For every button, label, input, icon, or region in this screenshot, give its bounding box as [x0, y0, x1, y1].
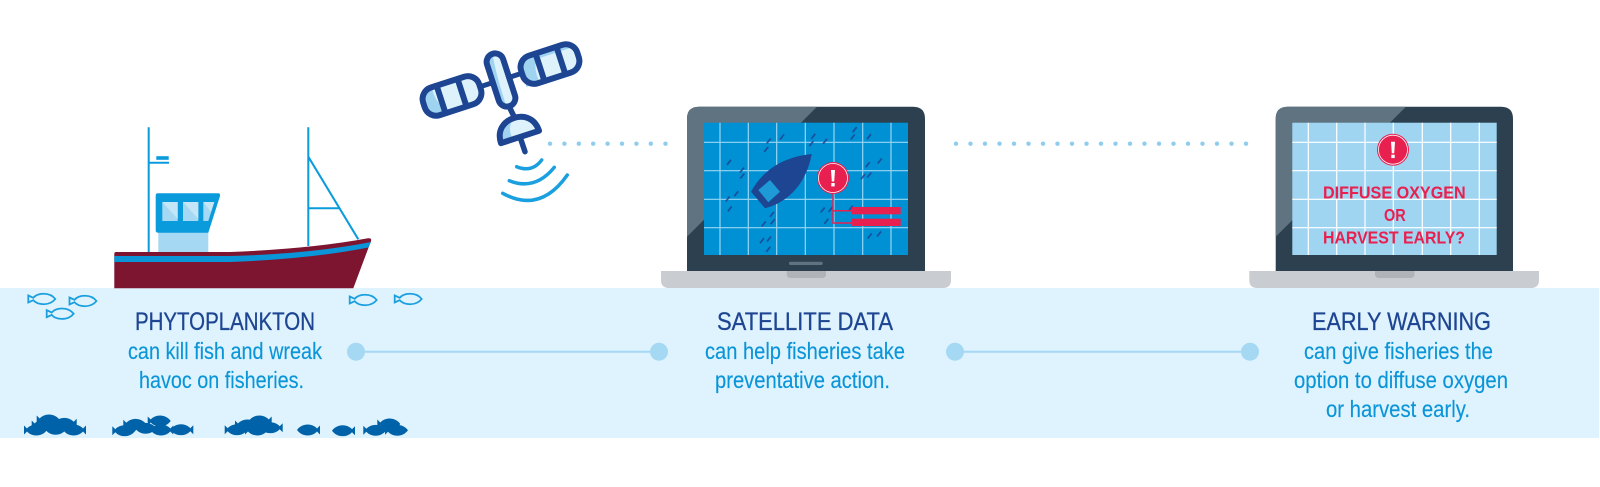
warning screen [1292, 123, 1497, 255]
hull [114, 238, 371, 288]
satellite connector and stem [510, 108, 525, 152]
satellite dish [495, 112, 539, 143]
alert labels [852, 207, 901, 226]
laptop base [661, 271, 951, 288]
warning text: OR [1384, 205, 1406, 225]
warning text: DIFFUSE OXYGEN [1323, 182, 1466, 202]
warning text: HARVEST EARLY? [1323, 227, 1465, 247]
body: or harvest early. [1326, 396, 1470, 422]
connector: phytoplankton to satellite data [347, 343, 668, 361]
body [1294, 338, 1508, 422]
body: can help fisheries take [705, 338, 905, 364]
satellite body and panels [415, 29, 587, 131]
lid highlight [1276, 107, 1406, 237]
heading: SATELLITE DATA [717, 308, 893, 336]
fishing boat [114, 127, 371, 288]
wheelhouse [156, 193, 220, 233]
body: can kill fish and wreak [128, 338, 322, 364]
alert badge [1377, 134, 1409, 166]
solid fish groups [24, 415, 408, 436]
body: option to diffuse oxygen [1294, 367, 1508, 393]
warning text [1323, 182, 1466, 247]
hull stripe [114, 242, 371, 262]
map screen [704, 123, 908, 255]
alert leader lines [833, 192, 852, 223]
outline fish school [28, 294, 422, 319]
body [705, 338, 905, 393]
lid highlight [687, 107, 817, 237]
connector: satellite data to early warning [946, 343, 1259, 361]
text block: satellite data [705, 308, 905, 393]
base notch [1375, 271, 1414, 278]
alert badge [817, 162, 849, 194]
cabin base [158, 232, 208, 253]
front mast [149, 127, 169, 252]
text block: phytoplankton [128, 308, 322, 393]
water band [0, 288, 1599, 438]
wheelhouse windows [162, 202, 214, 221]
screen grid [1292, 123, 1497, 255]
heading: EARLY WARNING [1312, 308, 1491, 336]
heading: PHYTOPLANKTON [135, 308, 315, 336]
signal waves [503, 160, 567, 200]
map grid [704, 123, 908, 255]
boat from above [751, 154, 812, 208]
body: havoc on fisheries. [139, 367, 304, 393]
laptop lid [687, 107, 925, 271]
text block: early warning [1294, 308, 1508, 422]
laptop base [1249, 271, 1539, 288]
trackpad slit [789, 262, 823, 265]
dotted line: laptop to laptop [954, 142, 1248, 146]
icon: satellite [415, 29, 587, 200]
body: preventative action. [715, 367, 890, 393]
body [128, 338, 322, 393]
phytoplankton specks [726, 127, 882, 252]
dotted line: satellite to laptop [548, 142, 668, 146]
rear mast and rigging [308, 127, 358, 246]
body: can give fisheries the [1304, 338, 1493, 364]
laptop: satellite map [661, 107, 951, 288]
laptop lid [1276, 107, 1513, 271]
laptop: early warning [1249, 107, 1539, 288]
base notch [787, 271, 826, 278]
